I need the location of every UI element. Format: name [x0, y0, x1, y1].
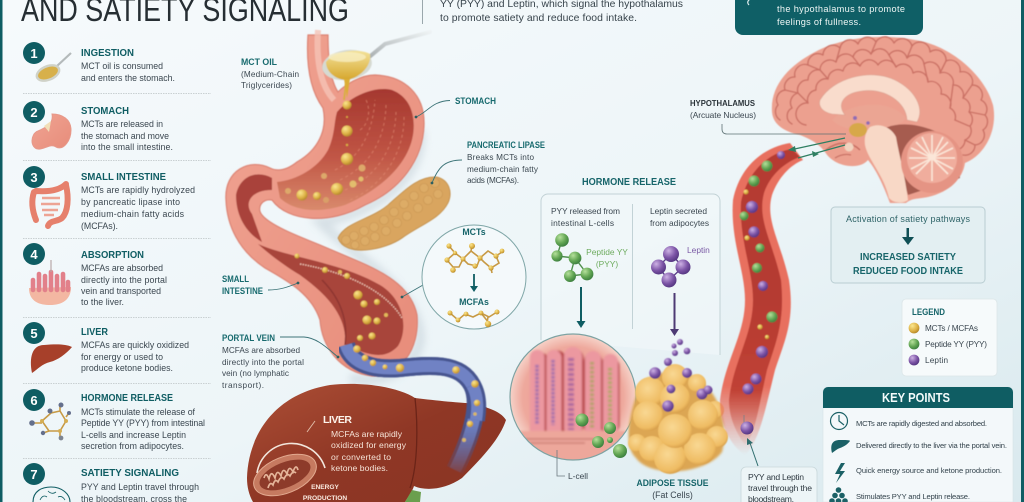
- adipose tissue cluster: [628, 339, 728, 474]
- step 6 hormone release: HORMONE RELEASE: [81, 393, 173, 404]
- legend: Peptide YY (PYY): [925, 340, 987, 349]
- leptin molecule: Leptin: [687, 245, 710, 255]
- brain: [772, 37, 994, 203]
- label: L-cell: L-cell: [568, 471, 588, 481]
- peptide YY molecule: (PYY): [596, 259, 618, 269]
- step 3 small intestine: by pancreatic lipase into: [81, 197, 180, 207]
- label: MCT oil: MCT OIL: [241, 57, 277, 67]
- label: adipose tissue: (Fat Cells): [652, 490, 693, 500]
- panel: key points: Quick energy source and ketone production.: [856, 466, 1002, 475]
- step 3 small intestine: [23, 166, 195, 231]
- callout: increased satiety: [831, 207, 985, 283]
- step 5 liver: [23, 322, 189, 373]
- intro text: [422, 0, 683, 24]
- label: pancreatic lipase: Breaks MCTs into: [467, 153, 534, 162]
- liver text: LIVER: [323, 414, 352, 426]
- panel: MCTs to MCFAs circle: MCTs: [462, 227, 486, 237]
- leptin molecule: [651, 245, 710, 288]
- liver text: MCFAs are rapidly: [331, 429, 403, 439]
- callout: top right hypothalamus note: feelings of fullness.: [777, 17, 861, 27]
- panel: key points: Delivered directly to the liver via the portal vein.: [856, 441, 1007, 450]
- frame edge right: [1021, 0, 1024, 502]
- hypothalamus: [844, 116, 870, 152]
- stomach and intestine wall: [226, 35, 424, 376]
- mitochondrion inset: [248, 421, 325, 502]
- step 3 small intestine: (MCFAs).: [81, 221, 118, 231]
- step 2 stomach: STOMACH: [81, 106, 129, 117]
- step 7 satiety signaling: 7: [30, 467, 38, 482]
- MCT molecule: [444, 243, 504, 273]
- step 4 absorption: to the liver.: [81, 297, 124, 307]
- panel: hormone release: [541, 194, 720, 355]
- step 4 absorption: [23, 243, 167, 307]
- label: portal vein: transport).: [222, 381, 264, 390]
- callout: increased satiety: REDUCED FOOD INTAKE: [853, 266, 963, 277]
- step 4 absorption: 4: [30, 247, 38, 262]
- step 1 ingestion: 1: [30, 46, 38, 61]
- step 3 small intestine: medium-chain fatty acids: [81, 209, 185, 219]
- step 2 stomach: [23, 101, 173, 152]
- leptin ball at vessel base: [740, 415, 754, 434]
- legend: Leptin: [925, 356, 948, 365]
- digestive tract: stomach and intestine: [226, 30, 424, 380]
- step 2 stomach: into the small intestine.: [81, 142, 173, 152]
- label: pancreatic lipase: acids (MCFAs).: [467, 176, 519, 185]
- pancreas: [338, 177, 450, 250]
- step 1 ingestion: INGESTION: [81, 48, 134, 59]
- label: stomach: STOMACH: [455, 96, 496, 106]
- callout: PYY and Leptin travel: PYY and Leptin: [748, 472, 804, 482]
- icon: clock: [830, 412, 848, 430]
- legend: [902, 299, 997, 376]
- step 6 hormone release: L-cells and increase Leptin: [81, 430, 186, 440]
- label: small intestine: [222, 274, 299, 296]
- label: stomach: [415, 96, 496, 118]
- cerebral folds: [775, 37, 988, 158]
- temporal shading and midbrain: [832, 105, 906, 129]
- label: portal vein: MCFAs are absorbed: [222, 346, 300, 355]
- callout: top right hypothalamus note: [735, 0, 923, 35]
- step 5 liver: produce ketone bodies.: [81, 363, 173, 373]
- arrow: leptin down: [670, 293, 679, 336]
- step 6 hormone release: Peptide YY (PYY) from intestinal: [81, 418, 205, 428]
- frame edge left: [0, 0, 2, 502]
- icon: cell cluster: [829, 487, 848, 502]
- liver text: ENERGY: [311, 484, 340, 491]
- label: small intestine: INTESTINE: [222, 286, 263, 296]
- panel: key points: Stimulates PYY and Leptin release.: [856, 492, 970, 501]
- corpus callosum: [820, 75, 920, 122]
- step 6 hormone release: secretion from adipocytes.: [81, 441, 184, 451]
- stomach lumen texture: [335, 98, 404, 200]
- label: portal vein: [222, 333, 339, 390]
- callout: PYY and Leptin travel: [741, 467, 817, 502]
- peptide YY molecule: Peptide YY: [586, 247, 628, 257]
- label: pancreatic lipase: [431, 140, 545, 185]
- step 7 satiety signaling: [23, 463, 199, 502]
- arrows: bloodstream to hypothalamus: [788, 138, 845, 158]
- label: portal vein: vein (no lymphatic: [222, 369, 289, 378]
- label: adipose tissue: [636, 478, 709, 500]
- step 4 absorption: directly into the portal: [81, 275, 167, 285]
- intestine lumen: [258, 244, 403, 355]
- panel: hormone release: PYY released from: [551, 206, 620, 216]
- label: hypothalamus: [690, 98, 846, 134]
- panel: key points: KEY POINTS: [882, 390, 950, 405]
- legend: LEGEND: [912, 307, 945, 317]
- dark cavity: [885, 124, 960, 195]
- step 7 satiety signaling: SATIETY SIGNALING: [81, 468, 179, 479]
- step 4 absorption: MCFAs are absorbed: [81, 263, 163, 273]
- label: MCT oil: (Medium-Chain: [241, 70, 299, 79]
- icon: spoon with MCT oil: [320, 32, 430, 98]
- intro text: to promote satiety and reduce food intake.: [440, 13, 637, 24]
- panel: MCTs to MCFAs circle: MCFAs: [459, 297, 489, 307]
- panel: key points: MCTs are rapidly digested and absorbed.: [856, 419, 987, 428]
- step 6 hormone release: 6: [30, 393, 38, 408]
- label: MCT oil: [241, 57, 299, 90]
- step 2 stomach: MCTs are released in: [81, 119, 163, 129]
- step 1 ingestion: [23, 42, 175, 85]
- liver text: oxidized for energy: [331, 440, 407, 450]
- callout: PYY and Leptin travel: travel through the: [748, 483, 812, 493]
- icon: liver: [831, 440, 850, 453]
- duodenum lumen: [236, 174, 272, 242]
- lens: intestinal villi with L-cells: [510, 334, 636, 463]
- blood vessel: [720, 143, 803, 455]
- portal vein: [346, 345, 480, 470]
- step 7 satiety signaling: PYY and Leptin travel through: [81, 482, 199, 492]
- step 2 stomach: the stomach and move: [81, 131, 169, 141]
- panel: hormone release: from adipocytes: [650, 218, 709, 228]
- step 6 hormone release: MCTs stimulate the release of: [81, 407, 196, 417]
- stomach lumen: [277, 89, 414, 210]
- arrow: [473, 274, 475, 287]
- step 3 small intestine: 3: [30, 170, 38, 185]
- step 5 liver: LIVER: [81, 327, 109, 338]
- label: MCT oil: Triglycerides): [241, 81, 292, 90]
- liver text: or converted to: [331, 452, 391, 462]
- liver text: ketone bodies.: [331, 463, 388, 473]
- panel: key points: [823, 387, 1013, 502]
- panel: hormone release: Leptin secreted: [650, 206, 707, 216]
- step 5 liver: MCFAs are quickly oxidized: [81, 340, 189, 350]
- label: pancreatic lipase: PANCREATIC LIPASE: [467, 140, 545, 150]
- step 5 liver: for energy or used to: [81, 352, 163, 362]
- heading: hormone release: HORMONE RELEASE: [582, 176, 676, 188]
- callout: increased satiety: INCREASED SATIETY: [860, 252, 956, 263]
- step 5 liver: 5: [30, 326, 38, 341]
- step 3 small intestine: SMALL INTESTINE: [81, 172, 166, 183]
- liver: [247, 384, 506, 502]
- step 1 ingestion: and enters the stomach.: [81, 73, 175, 83]
- label: portal vein: directly into the portal: [222, 358, 304, 367]
- panel: MCTs to MCFAs circle: [401, 225, 526, 329]
- peptide YY molecule: [551, 233, 628, 282]
- step 2 stomach: 2: [30, 105, 38, 120]
- label: hypothalamus: (Arcuate Nucleus): [690, 110, 756, 120]
- label: L-cell: [557, 450, 588, 481]
- callout: increased satiety: Activation of satiety pathways: [846, 214, 970, 224]
- label: small intestine: SMALL: [222, 274, 249, 284]
- panel: hormone release: intestinal L-cells: [551, 218, 614, 228]
- step 3 small intestine: MCTs are rapidly hydrolyzed: [81, 185, 195, 195]
- oil droplets in stomach: [285, 84, 366, 203]
- panel: steps: [23, 42, 211, 502]
- label: hypothalamus: HYPOTHALAMUS: [690, 98, 755, 108]
- label: adipose tissue: ADIPOSE TISSUE: [636, 478, 709, 489]
- label: pancreatic lipase: medium-chain fatty: [467, 165, 539, 174]
- MCFA molecule: [448, 310, 500, 327]
- liver text: PRODUCTION: [303, 495, 347, 502]
- arrow: to vessel: [747, 438, 758, 466]
- liver text: [303, 414, 407, 502]
- label: portal vein: PORTAL VEIN: [222, 333, 275, 343]
- arrow: PYY down: [576, 287, 586, 328]
- callout: top right hypothalamus note: the hypothalamus to promote: [777, 4, 905, 14]
- step 4 absorption: vein and transported: [81, 286, 161, 296]
- cerebellum: [901, 131, 963, 193]
- brainstem: [865, 125, 908, 202]
- step 6 hormone release: [23, 389, 205, 451]
- step 4 absorption: ABSORPTION: [81, 250, 144, 261]
- icon: lightning: [835, 463, 845, 483]
- esophagus highlight: [318, 30, 334, 100]
- step 1 ingestion: MCT oil is consumed: [81, 61, 163, 71]
- legend: MCTs / MCFAs: [925, 324, 978, 333]
- intestine fatty acid dots: [294, 254, 388, 341]
